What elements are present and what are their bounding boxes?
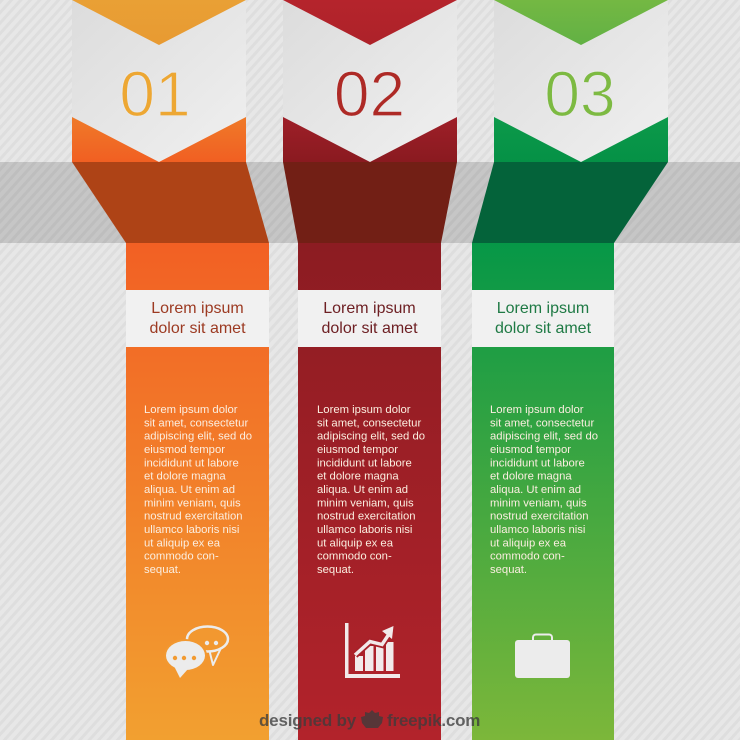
- body text: minim veniam, quis: [144, 497, 241, 509]
- panel: column 03: [472, 0, 668, 740]
- heading strip: Lorem ipsum: [151, 300, 244, 317]
- watermark: designed by: [259, 711, 357, 730]
- body text: nostrud exercitation: [144, 511, 243, 523]
- body text: sequat.: [317, 564, 354, 576]
- red ribbon: [298, 243, 441, 740]
- body text: adipiscing elit, sed do: [317, 431, 425, 443]
- body text: incididunt ut labore: [490, 457, 585, 469]
- icon: briefcase: [515, 634, 570, 678]
- body text: commodo con-: [144, 551, 219, 563]
- body text: sit amet, consectetur: [144, 417, 248, 429]
- body text: commodo con-: [490, 551, 565, 563]
- heading strip: [298, 290, 441, 347]
- body text: Lorem ipsum dolor: [144, 404, 238, 416]
- number card 01: [72, 0, 246, 162]
- fold shadow: [472, 162, 668, 243]
- number card 03: 03: [544, 58, 616, 130]
- body text: ullamco laboris nisi: [144, 524, 239, 536]
- body text: ut aliquip ex ea: [317, 537, 394, 549]
- heading strip: Lorem ipsum: [497, 300, 589, 317]
- body text: aliqua. Ut enim ad: [144, 484, 235, 496]
- fold shadow: [283, 162, 457, 243]
- body text: et dolore magna: [317, 471, 399, 483]
- body text: commodo con-: [317, 551, 392, 563]
- fold shadow: [72, 162, 269, 243]
- icon: freepik logo: [361, 710, 383, 728]
- body text: ullamco laboris nisi: [317, 524, 412, 536]
- body text: Lorem ipsum dolor: [490, 404, 584, 416]
- number card 02: 02: [334, 58, 405, 130]
- body text: eiusmod tempor: [317, 444, 398, 456]
- body text: aliqua. Ut enim ad: [490, 484, 581, 496]
- heading strip: [126, 290, 269, 347]
- body text: et dolore magna: [490, 471, 572, 483]
- watermark: [259, 710, 480, 730]
- body text: adipiscing elit, sed do: [144, 431, 252, 443]
- body text: aliqua. Ut enim ad: [317, 484, 408, 496]
- body text: nostrud exercitation: [490, 511, 589, 523]
- body text: et dolore magna: [144, 471, 226, 483]
- body text: sit amet, consectetur: [317, 417, 421, 429]
- panel: column 01: [72, 0, 269, 740]
- body text: nostrud exercitation: [317, 511, 416, 523]
- horizontal grey band: [0, 162, 740, 243]
- number card 02: [283, 0, 457, 162]
- body text: Lorem ipsum dolor: [317, 404, 411, 416]
- panel: column 02: [283, 0, 457, 740]
- heading strip: dolor sit amet: [321, 320, 418, 337]
- body text: incididunt ut labore: [144, 457, 239, 469]
- green ribbon: [472, 243, 614, 740]
- body text: eiusmod tempor: [490, 444, 571, 456]
- heading strip: [472, 290, 614, 347]
- body text: ullamco laboris nisi: [490, 524, 585, 536]
- body text: ut aliquip ex ea: [490, 537, 567, 549]
- watermark: freepik.com: [387, 711, 480, 730]
- body text: ut aliquip ex ea: [144, 537, 221, 549]
- body text: minim veniam, quis: [317, 497, 414, 509]
- body text: minim veniam, quis: [490, 497, 587, 509]
- body text: incididunt ut labore: [317, 457, 412, 469]
- number card 01: 01: [119, 58, 191, 130]
- number card 03: [494, 0, 668, 162]
- body text: sit amet, consectetur: [490, 417, 594, 429]
- heading strip: Lorem ipsum: [323, 300, 416, 317]
- body text: adipiscing elit, sed do: [490, 431, 598, 443]
- icon: rising bar chart: [345, 623, 400, 678]
- body text: sequat.: [144, 564, 181, 576]
- body text: eiusmod tempor: [144, 444, 225, 456]
- icon: speech bubbles: [164, 626, 228, 678]
- heading strip: dolor sit amet: [495, 320, 592, 337]
- orange ribbon: [126, 243, 269, 740]
- body text: sequat.: [490, 564, 527, 576]
- heading strip: dolor sit amet: [149, 320, 246, 337]
